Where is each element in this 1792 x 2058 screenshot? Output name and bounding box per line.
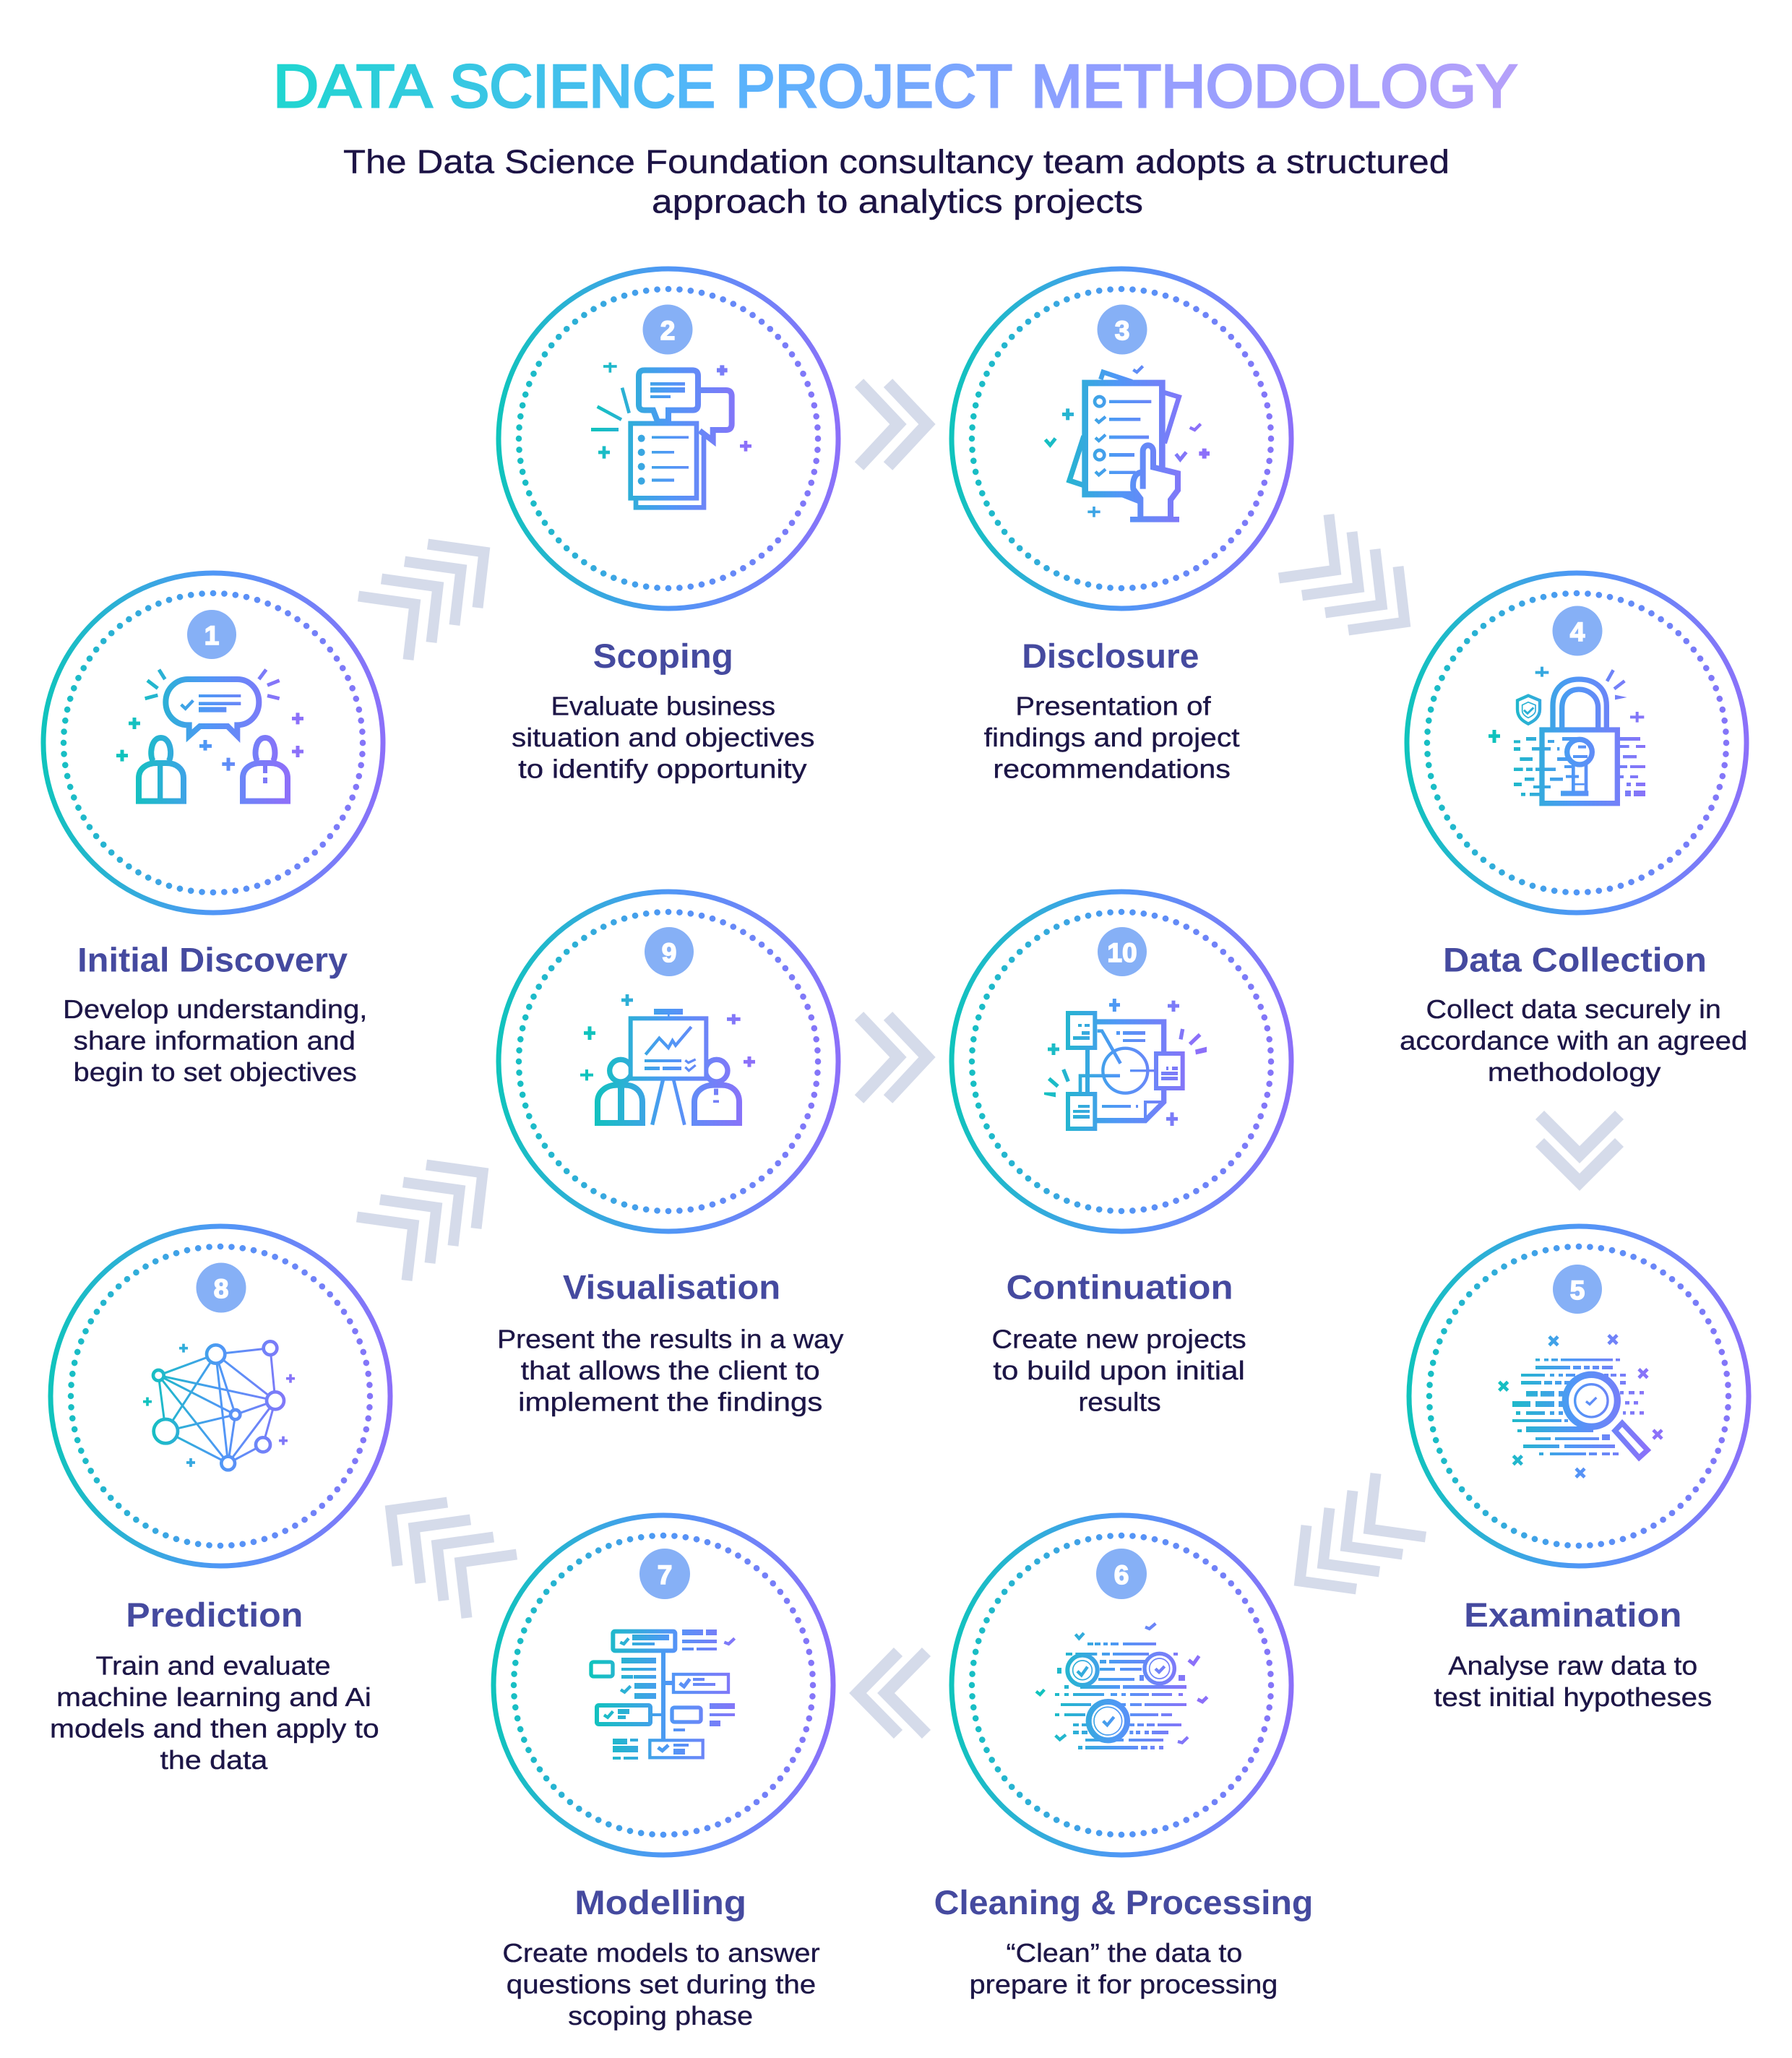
arrow: step 9 to step 10 bbox=[859, 1016, 927, 1099]
description bbox=[63, 996, 367, 1088]
number badge 10: 10 bbox=[1107, 938, 1137, 968]
heading: Visualisation bbox=[563, 1267, 780, 1306]
ring bbox=[499, 269, 838, 608]
number badge 2: 2 bbox=[660, 316, 675, 345]
icon: padlock and shield bbox=[1489, 667, 1645, 804]
panel: step 7 Modelling bbox=[494, 1515, 833, 2031]
number badge 5 bbox=[1553, 1265, 1602, 1314]
description: findings and project bbox=[984, 724, 1241, 753]
arrow: step 7 to step 8 bbox=[391, 1502, 517, 1618]
panel: step 1 Initial Discovery bbox=[43, 573, 383, 1088]
description: Present the results in a way bbox=[497, 1326, 843, 1355]
ring bbox=[499, 892, 838, 1231]
ring bbox=[43, 573, 383, 913]
panel: step 8 Prediction bbox=[50, 1226, 390, 1775]
step 8 text bbox=[50, 1596, 379, 1775]
arrow: step 4 to step 5 bbox=[1540, 1115, 1619, 1182]
description: to build upon initial bbox=[993, 1357, 1245, 1386]
icon: connected documents and diagram bbox=[1044, 999, 1207, 1129]
number badge 6: 6 bbox=[1114, 1560, 1129, 1590]
number badge 8: 8 bbox=[214, 1274, 228, 1304]
heading: Examination bbox=[1464, 1596, 1681, 1635]
heading: Disclosure bbox=[1022, 637, 1199, 676]
panel: step 6 Cleaning & Processing bbox=[934, 1515, 1313, 2000]
panel: step 2 Scoping bbox=[499, 269, 838, 785]
description: Analyse raw data to bbox=[1448, 1653, 1697, 1682]
description: Train and evaluate bbox=[96, 1653, 331, 1682]
number badge 6 bbox=[1096, 1549, 1147, 1599]
icon: neural network bbox=[143, 1341, 295, 1470]
description: Presentation of bbox=[1015, 693, 1212, 722]
panel: step 4 Data Collection bbox=[1400, 573, 1747, 1088]
number badge 5: 5 bbox=[1570, 1275, 1585, 1305]
arrow: step 2 to step 3 bbox=[859, 383, 927, 466]
subtitle: The Data Science Foundation consultancy team adopts a structured bbox=[343, 143, 1449, 181]
description bbox=[1400, 996, 1747, 1088]
description: recommendations bbox=[993, 756, 1231, 785]
title: DATA bbox=[273, 52, 432, 120]
step 10 text bbox=[992, 1267, 1246, 1418]
ring bbox=[952, 269, 1291, 608]
icon: presentation board and people bbox=[580, 994, 755, 1125]
description bbox=[970, 1939, 1278, 2000]
step 2 text bbox=[512, 637, 814, 785]
number badge 3 bbox=[1097, 305, 1147, 354]
step 4 text bbox=[1400, 940, 1747, 1088]
description: Evaluate business bbox=[551, 693, 775, 722]
ring bbox=[1409, 1226, 1749, 1566]
description bbox=[1434, 1653, 1712, 1713]
arrow: step 8 to step 9 bbox=[357, 1165, 483, 1280]
number badge 1 bbox=[187, 610, 236, 659]
icon: data with check seals bbox=[1036, 1624, 1207, 1749]
heading: Modelling bbox=[574, 1882, 746, 1922]
number badge 7: 7 bbox=[658, 1560, 672, 1590]
description: questions set during the bbox=[507, 1971, 816, 2000]
subtitle: approach to analytics projects bbox=[652, 182, 1143, 220]
number badge 9: 9 bbox=[662, 938, 676, 968]
description bbox=[984, 693, 1241, 785]
subtitle bbox=[343, 143, 1449, 220]
arrow: step 3 to step 4 bbox=[1279, 514, 1405, 630]
heading: Continuation bbox=[1006, 1267, 1233, 1306]
description bbox=[512, 693, 814, 785]
description: share information and bbox=[74, 1028, 356, 1056]
description bbox=[50, 1653, 379, 1775]
arrow: step 1 to step 2 bbox=[358, 544, 484, 660]
title: PROJECT bbox=[736, 52, 1012, 120]
description: “Clean” the data to bbox=[1006, 1939, 1242, 1968]
description: models and then apply to bbox=[50, 1715, 379, 1744]
number badge 8 bbox=[197, 1263, 246, 1312]
icon: two people talking bbox=[116, 670, 303, 801]
heading: Initial Discovery bbox=[77, 940, 348, 979]
icon: flow chart bbox=[591, 1629, 735, 1760]
heading: Scoping bbox=[593, 637, 733, 676]
description: implement the findings bbox=[518, 1389, 822, 1418]
description: begin to set objectives bbox=[74, 1059, 357, 1088]
ring bbox=[952, 1515, 1291, 1855]
description: Develop understanding, bbox=[63, 996, 367, 1025]
description: that allows the client to bbox=[521, 1357, 820, 1386]
description: situation and objectives bbox=[512, 724, 814, 753]
title bbox=[273, 52, 1517, 120]
number badge 7 bbox=[639, 1549, 690, 1599]
description bbox=[992, 1326, 1246, 1418]
panel: step 3 Disclosure bbox=[952, 269, 1291, 785]
step 6 text bbox=[934, 1882, 1313, 2000]
description: to identify opportunity bbox=[518, 756, 807, 785]
step 7 text bbox=[502, 1882, 820, 2031]
description: the data bbox=[160, 1747, 269, 1775]
ring bbox=[494, 1515, 833, 1855]
icon: magnifying glass over data bbox=[1499, 1335, 1662, 1477]
title: SCIENCE bbox=[449, 52, 715, 120]
number badge 10 bbox=[1098, 927, 1147, 976]
panel: step 5 Examination bbox=[1409, 1226, 1749, 1713]
heading: Prediction bbox=[126, 1596, 303, 1635]
heading: Data Collection bbox=[1443, 940, 1707, 979]
description: Create new projects bbox=[992, 1326, 1246, 1355]
step 5 text bbox=[1434, 1596, 1712, 1713]
heading: Cleaning & Processing bbox=[934, 1882, 1313, 1922]
step 9 text bbox=[497, 1267, 843, 1418]
ring bbox=[1407, 573, 1746, 913]
description: methodology bbox=[1488, 1059, 1660, 1088]
ring bbox=[952, 892, 1291, 1231]
description: accordance with an agreed bbox=[1400, 1028, 1747, 1056]
number badge 1: 1 bbox=[204, 621, 219, 650]
description: machine learning and Ai bbox=[56, 1684, 371, 1713]
description: Create models to answer bbox=[502, 1939, 820, 1968]
number badge 4: 4 bbox=[1570, 617, 1585, 647]
number badge 9 bbox=[645, 927, 694, 976]
panel: step 10 Continuation bbox=[952, 892, 1291, 1418]
ring bbox=[51, 1226, 390, 1566]
arrow: step 5 to step 6 bbox=[1300, 1473, 1426, 1589]
icon: documents and speech bubbles bbox=[591, 363, 751, 507]
number badge 4 bbox=[1552, 606, 1603, 656]
panel: step 9 Visualisation bbox=[497, 892, 843, 1418]
description: test initial hypotheses bbox=[1434, 1684, 1712, 1713]
title: METHODOLOGY bbox=[1031, 52, 1517, 120]
step 3 text bbox=[984, 637, 1241, 785]
description bbox=[502, 1939, 820, 2031]
description bbox=[497, 1326, 843, 1418]
description: scoping phase bbox=[568, 2002, 753, 2031]
description: Collect data securely in bbox=[1426, 996, 1721, 1025]
arrow: step 6 to step 7 bbox=[858, 1652, 926, 1734]
description: results bbox=[1078, 1389, 1161, 1418]
number badge 3: 3 bbox=[1115, 316, 1129, 345]
step 1 text bbox=[63, 940, 367, 1088]
icon: checklist and hand bbox=[1046, 366, 1210, 522]
number badge 2 bbox=[643, 305, 692, 354]
description: prepare it for processing bbox=[970, 1971, 1278, 2000]
